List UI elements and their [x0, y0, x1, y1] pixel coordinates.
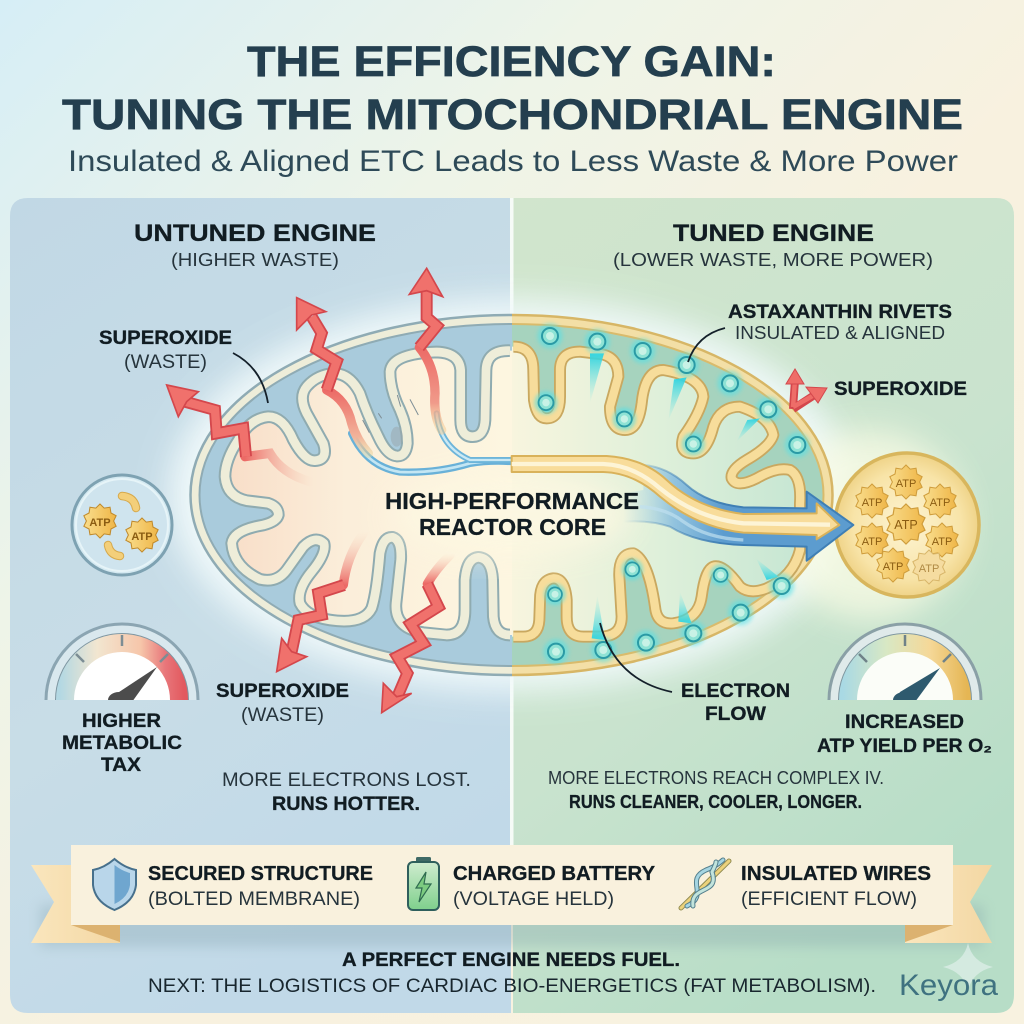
callout: core label: HIGH-PERFORMANCE [385, 488, 639, 514]
text: tuned summary: RUNS CLEANER, COOLER, LONGER. [569, 792, 862, 812]
icon: ATP abundance circle: ATP [919, 563, 939, 575]
gold arrow [512, 456, 839, 539]
arrow: lower right [382, 555, 450, 713]
label: higher metabolic tax: METABOLIC [62, 733, 182, 754]
callout: superoxide lower [216, 681, 349, 726]
damage marks [363, 395, 418, 447]
mitochondrion: untuned half [189, 314, 512, 676]
mitochondrion: tuned half [512, 314, 834, 676]
small superoxide arrows and label: SUPEROXIDE [834, 379, 967, 400]
blue arrow [623, 465, 853, 561]
callout: electron flow: ELECTRON [681, 681, 790, 702]
gauge: ATP yield [828, 622, 982, 700]
icon: ATP abundance circle: ATP [894, 518, 918, 532]
text: tuned summary [548, 768, 884, 812]
arrows: superoxide leaks, untuned [167, 268, 450, 713]
electron leak streams: blue [352, 413, 513, 472]
panel: tuned engine background [513, 198, 1014, 1013]
callout: astaxanthin rivets: ASTAXANTHIN RIVETS [728, 302, 952, 323]
arrow: upper middle [297, 298, 368, 453]
subtitle: Insulated & Aligned ETC Leads to Less Waste & More Power [68, 145, 958, 178]
callout: astaxanthin rivets [688, 302, 952, 362]
arrow: top [409, 268, 443, 430]
rivets and electron spikes [534, 323, 810, 664]
title: TUNING THE MITOCHONDRIAL ENGINE [62, 91, 963, 139]
callout: superoxide upper left [99, 328, 268, 403]
item: secured structure: (BOLTED MEMBRANE) [148, 889, 360, 910]
text: untuned summary: RUNS HOTTER. [272, 793, 420, 815]
icon: ATP abundance circle: ATP [932, 536, 952, 548]
logo: Keyora with sparkle [899, 943, 998, 1002]
electron spikes [590, 353, 778, 640]
text: untuned summary [222, 769, 471, 815]
arrow: lower left [277, 533, 363, 672]
icon: shield [93, 859, 136, 910]
ribbon tail left [31, 865, 120, 943]
text: untuned summary: MORE ELECTRONS LOST. [222, 769, 471, 791]
ribbon tail right [905, 865, 992, 943]
item: insulated wires [741, 863, 931, 910]
label: increased ATP yield: ATP YIELD PER O₂ [817, 736, 992, 757]
icon: low ATP circle [72, 475, 172, 575]
icon: ATP abundance circle: ATP [862, 497, 882, 509]
icon: ATP abundance circle: ATP [883, 561, 903, 573]
heading: untuned engine: (HIGHER WASTE) [171, 249, 339, 270]
flow arrow: efficient electron flow [512, 456, 853, 561]
icon: insulated wires [681, 860, 729, 908]
item: charged battery: (VOLTAGE HELD) [453, 889, 614, 910]
small superoxide arrows and label [786, 369, 967, 409]
item: insulated wires: (EFFICIENT FLOW) [741, 889, 917, 910]
title [62, 38, 963, 139]
item: secured structure: SECURED STRUCTURE [148, 863, 373, 885]
heading: tuned engine: (LOWER WASTE, MORE POWER) [613, 249, 933, 270]
gauge: metabolic tax [44, 622, 200, 700]
icon: low ATP circle: ATP [131, 531, 153, 543]
callout: core label [385, 488, 639, 540]
logo: Keyora with sparkle: Keyora [899, 969, 998, 1002]
label: increased ATP yield: INCREASED [845, 712, 964, 733]
heading: tuned engine: TUNED ENGINE [673, 220, 874, 247]
heading: untuned engine [134, 220, 376, 270]
core glow [392, 475, 632, 555]
footer text: A PERFECT ENGINE NEEDS FUEL. [342, 950, 680, 971]
callout: superoxide lower: (WASTE) [241, 705, 324, 726]
icon: ATP abundance circle [835, 453, 979, 597]
label: higher metabolic tax [62, 711, 182, 776]
label: increased ATP yield [817, 712, 992, 757]
item: insulated wires: INSULATED WIRES [741, 863, 931, 885]
footer text: NEXT: THE LOGISTICS OF CARDIAC BIO-ENERGETICS (FAT METABOLISM). [148, 976, 876, 997]
callout: superoxide upper left: (WASTE) [124, 352, 207, 373]
icon: battery [408, 857, 439, 910]
text: tuned summary: MORE ELECTRONS REACH COMPLEX IV. [548, 768, 884, 788]
arrow: left [167, 385, 310, 482]
label: higher metabolic tax: TAX [101, 755, 141, 776]
label: higher metabolic tax: HIGHER [82, 711, 161, 732]
icon: low ATP circle: ATP [89, 517, 111, 529]
callout: astaxanthin rivets: INSULATED & ALIGNED [735, 323, 945, 343]
icon: ATP abundance circle: ATP [896, 478, 916, 490]
icon: ATP abundance circle: ATP [930, 497, 950, 509]
mitochondrion glow [169, 299, 965, 691]
callout: core label: REACTOR CORE [419, 514, 606, 540]
footer text [148, 950, 876, 997]
callout: superoxide upper left: SUPEROXIDE [99, 328, 232, 349]
icon: ATP abundance circle: ATP [862, 536, 882, 548]
item: charged battery: CHARGED BATTERY [453, 863, 656, 885]
heading: untuned engine: UNTUNED ENGINE [134, 220, 376, 247]
callout: electron flow [600, 623, 790, 725]
title: THE EFFICIENCY GAIN: [247, 38, 776, 86]
item: charged battery [453, 863, 656, 910]
panel: untuned engine background [10, 198, 511, 1013]
rivets [534, 323, 810, 664]
banner [31, 845, 992, 947]
callout: electron flow: FLOW [705, 704, 766, 725]
item: secured structure [148, 863, 373, 910]
callout: superoxide lower: SUPEROXIDE [216, 681, 349, 702]
heading: tuned engine [613, 220, 933, 270]
